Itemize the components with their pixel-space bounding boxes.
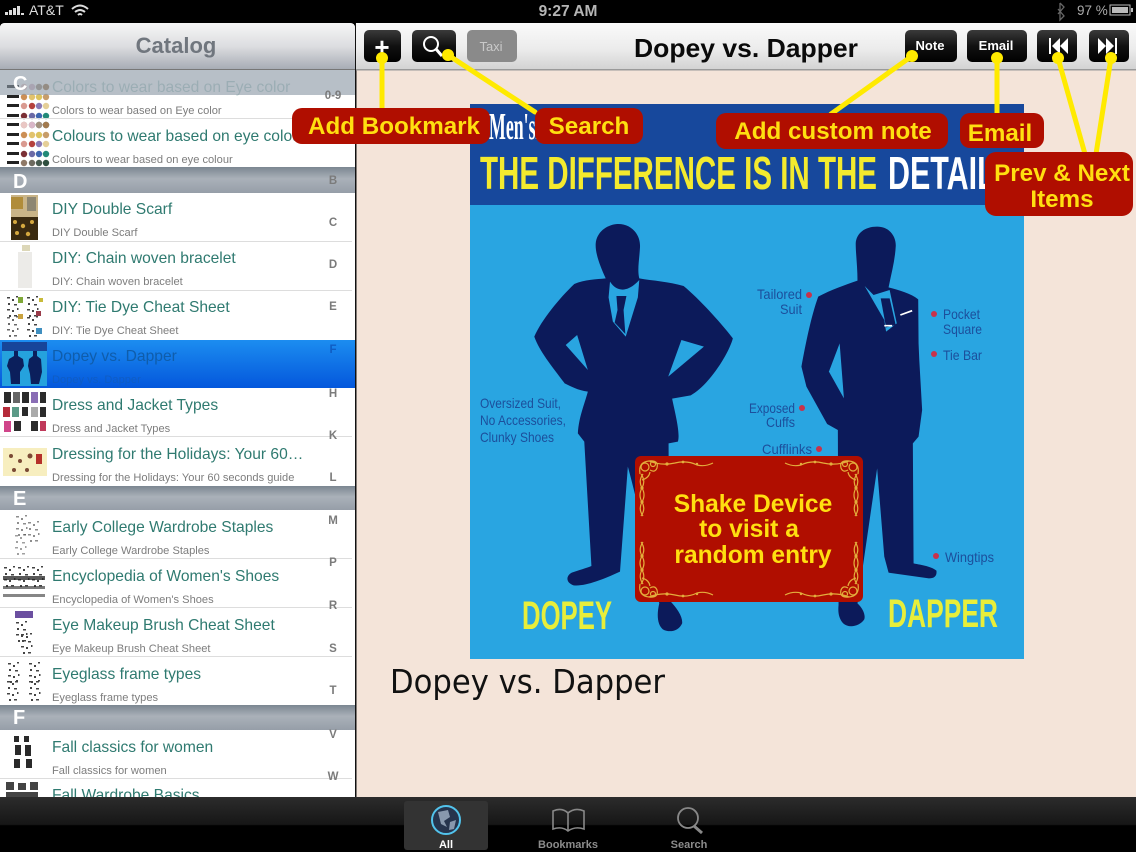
row: Encyclopedia of Women's Shoes — [0, 566, 352, 608]
button: bookmark — [364, 30, 401, 62]
row: Eyeglass frame types: Eyeglass frame types — [52, 692, 159, 704]
row: Early College Wardrobe Staples: Early College Wardrobe Staples — [52, 545, 210, 557]
button: previous — [1037, 30, 1077, 62]
row: Early College Wardrobe Staples — [0, 515, 352, 559]
alphabet index: 0-9 — [325, 90, 341, 102]
section header F — [0, 705, 355, 730]
row: Dress and Jacket Types: Dress and Jacket Types — [52, 397, 218, 414]
catalog header — [0, 23, 355, 70]
label: DAPPER: DAPPER — [888, 592, 998, 636]
section header E: E — [13, 488, 26, 510]
button: Email: Email — [979, 38, 1013, 53]
callout: Prev & Next Items: Items — [1030, 186, 1094, 213]
button: Taxi — [467, 30, 517, 62]
carrier: AT&T — [29, 2, 64, 18]
callout: Email — [960, 113, 1044, 148]
row: Eyeglass frame types: Eyeglass frame types — [52, 666, 201, 683]
alphabet index: F — [329, 344, 337, 356]
row: DIY Chain woven bracelet: DIY: Chain woven bracelet — [52, 276, 183, 288]
annotation: Tailored Suit: Tailored — [757, 286, 802, 302]
panel: infographic image — [470, 104, 1024, 659]
row: Eye Makeup Brush Cheat Sheet: Eye Makeup Brush Cheat Sheet — [52, 617, 275, 634]
section header D: D — [13, 171, 27, 193]
tab: All — [404, 801, 488, 851]
callout: Add custom note — [716, 113, 948, 149]
divider between panes — [355, 23, 356, 798]
alphabet index: R — [329, 600, 338, 612]
figure: Dapper silhouette — [801, 227, 937, 626]
row: Colours to wear: Colours to wear based on eye colour — [52, 154, 233, 166]
alphabet index: W — [328, 771, 339, 783]
row: Dopey vs. Dapper (selected): Dopey vs. Dapper — [52, 374, 141, 386]
row: DIY Double Scarf — [0, 195, 352, 242]
row: Fall Wardrobe Basics: Fall Wardrobe Basics — [52, 787, 200, 804]
icon: signal bars — [5, 6, 24, 15]
row: DIY Chain woven bracelet: DIY: Chain woven bracelet — [52, 250, 236, 267]
callout: shake device: random entry — [674, 542, 832, 569]
row: Encyclopedia of Women's Shoes: Encyclopedia of Women's Shoes — [52, 594, 214, 606]
arrow: email — [994, 54, 1000, 114]
row: Fall classics for women: Fall classics for women — [52, 765, 167, 777]
alphabet index: K — [329, 430, 338, 442]
row: Colours to wear: Colours to wear based on eye colour — [52, 128, 306, 145]
toolbar — [356, 23, 1136, 70]
row: Colors to wear — [0, 79, 352, 128]
callout: Add custom note: Add custom note — [734, 118, 932, 145]
callout: shake device: Shake Device — [674, 491, 832, 518]
callout: Search — [535, 108, 643, 144]
annotation: Tailored Suit — [757, 286, 812, 317]
panel: infographic image: Men'sHealth — [489, 106, 587, 148]
row: Fall classics for women — [0, 736, 352, 779]
arrow: search — [444, 52, 535, 112]
annotation: Tie Bar: Tie Bar — [943, 347, 982, 363]
annotation: Oversized Suit — [480, 395, 566, 445]
row: Fall classics for women: Fall classics for women — [52, 739, 213, 756]
alphabet index — [325, 90, 341, 783]
callout: shake device: to visit a — [699, 516, 799, 543]
callout: shake device — [635, 456, 863, 602]
button: Note — [905, 30, 957, 62]
label: DOPEY: DOPEY — [522, 594, 612, 638]
status bar — [0, 0, 1136, 23]
tab: All: All — [439, 839, 453, 851]
button: search — [412, 30, 456, 62]
alphabet index: S — [329, 643, 337, 655]
alphabet index: E — [329, 301, 337, 313]
annotation: Oversized Suit: Oversized Suit, — [480, 395, 561, 411]
row: DIY Tie Dye Cheat Sheet — [7, 296, 230, 337]
row: Dopey vs. Dapper (selected) — [0, 340, 355, 388]
alphabet index: M — [328, 515, 338, 527]
section header D — [0, 167, 355, 193]
callout: Add Bookmark — [292, 108, 490, 144]
row: Colors to wear: Colors to wear based on Eye color — [52, 105, 222, 117]
button: next — [1089, 30, 1129, 62]
row: Dressing for the Holidays: Dressing for the Holidays: Your 60 seconds guide — [52, 472, 294, 484]
section header F: F — [13, 707, 25, 729]
button: Taxi: Taxi — [479, 39, 503, 54]
button: Email — [967, 30, 1027, 62]
row: Dressing for the Holidays — [3, 446, 303, 484]
callout: Add Bookmark: Add Bookmark — [308, 113, 481, 140]
icon: bluetooth — [1058, 3, 1064, 20]
row: Colors to wear: Colors to wear based on Eye color — [52, 79, 290, 96]
infographic headline: DETAILS — [888, 147, 1016, 199]
alphabet index: P — [329, 557, 337, 569]
annotation: Tailored Suit: Suit — [780, 301, 802, 317]
annotation: Pocket Square — [931, 306, 982, 337]
section header C (translucent): C — [13, 73, 27, 95]
alphabet index: C — [329, 217, 337, 229]
annotation: Oversized Suit: Clunky Shoes — [480, 429, 554, 445]
annotation: Wingtips: Wingtips — [945, 549, 994, 565]
tab: Bookmarks — [538, 809, 598, 851]
row: DIY Tie Dye Cheat Sheet: DIY: Tie Dye Cheat Sheet — [52, 325, 178, 337]
arrow: note — [831, 52, 916, 114]
panel: detail page background — [356, 23, 1136, 797]
tab: Search — [671, 808, 708, 851]
row: Dressing for the Holidays: Dressing for the Holidays: Your 60… — [52, 446, 303, 463]
annotation: Exposed Cuffs: Exposed — [749, 400, 795, 416]
annotation: Exposed Cuffs — [749, 400, 805, 430]
time: 9:27 AM — [539, 3, 597, 20]
alphabet index: L — [329, 472, 337, 484]
ornate gold border — [640, 461, 858, 597]
icon: battery — [1110, 5, 1133, 15]
alphabet index: D — [329, 259, 337, 271]
alphabet index: V — [329, 729, 337, 741]
annotation: Cufflinks: Cufflinks — [762, 441, 812, 457]
row: DIY Double Scarf: DIY Double Scarf — [52, 227, 138, 239]
annotation: Pocket Square: Pocket — [943, 306, 980, 322]
callout: Prev & Next Items: Prev & Next — [994, 160, 1130, 187]
alphabet index: B — [329, 175, 337, 187]
row: Fall Wardrobe Basics — [6, 782, 200, 804]
annotation: Tie Bar — [931, 347, 982, 363]
tab: Bookmarks: Bookmarks — [538, 839, 598, 851]
row: Dress and Jacket Types: Dress and Jacket Types — [52, 423, 171, 435]
section header C (translucent) — [0, 70, 355, 95]
row: Encyclopedia of Women's Shoes: Encyclopedia of Women's Shoes — [52, 568, 279, 585]
button: Note: Note — [916, 38, 944, 53]
catalog header: Catalog — [136, 33, 216, 58]
toolbar title: Dopey vs. Dapper — [634, 33, 858, 63]
row: Colours to wear — [7, 122, 306, 166]
alphabet index: T — [329, 685, 337, 697]
arrow: next — [1096, 54, 1114, 154]
arrows: yellow pointers — [378, 52, 1114, 154]
row: Eyeglass frame types — [7, 662, 201, 704]
annotation: Exposed Cuffs: Cuffs — [766, 414, 795, 430]
arrow: bookmark — [378, 54, 386, 108]
alphabet index: H — [329, 388, 337, 400]
callout: Search: Search — [549, 113, 629, 140]
caption: Dopey vs. Dapper — [390, 662, 665, 701]
callout: Prev & Next Items — [985, 152, 1133, 216]
row: DIY Tie Dye Cheat Sheet: DIY: Tie Dye Cheat Sheet — [52, 299, 230, 316]
row: Early College Wardrobe Staples: Early College Wardrobe Staples — [52, 519, 274, 536]
row: Eye Makeup Brush Cheat Sheet: Eye Makeup Brush Cheat Sheet — [52, 643, 210, 655]
panel: catalog sidebar — [0, 23, 355, 804]
section header E — [0, 486, 355, 510]
infographic headline: THE DIFFERENCE IS IN THE — [480, 147, 877, 199]
row: DIY Chain woven bracelet — [0, 245, 352, 291]
row: Eye Makeup Brush Cheat Sheet — [0, 611, 352, 657]
annotation: Oversized Suit: No Accessories, — [480, 412, 566, 428]
row: DIY Double Scarf: DIY Double Scarf — [52, 201, 173, 218]
header band — [470, 104, 1024, 205]
tab: Search: Search — [671, 839, 708, 851]
figure: Dopey silhouette — [534, 224, 733, 631]
battery percent: 97 % — [1077, 3, 1108, 18]
row: Dress and Jacket Types — [0, 392, 352, 437]
button: bookmark: + — [374, 32, 390, 62]
row: Dopey vs. Dapper (selected): Dopey vs. Dapper — [52, 348, 177, 365]
tab bar — [0, 797, 1136, 852]
arrow: previous — [1054, 54, 1085, 154]
annotation: Pocket Square: Square — [943, 321, 982, 337]
callout: Email: Email — [968, 120, 1032, 147]
icon: wifi — [72, 6, 88, 15]
